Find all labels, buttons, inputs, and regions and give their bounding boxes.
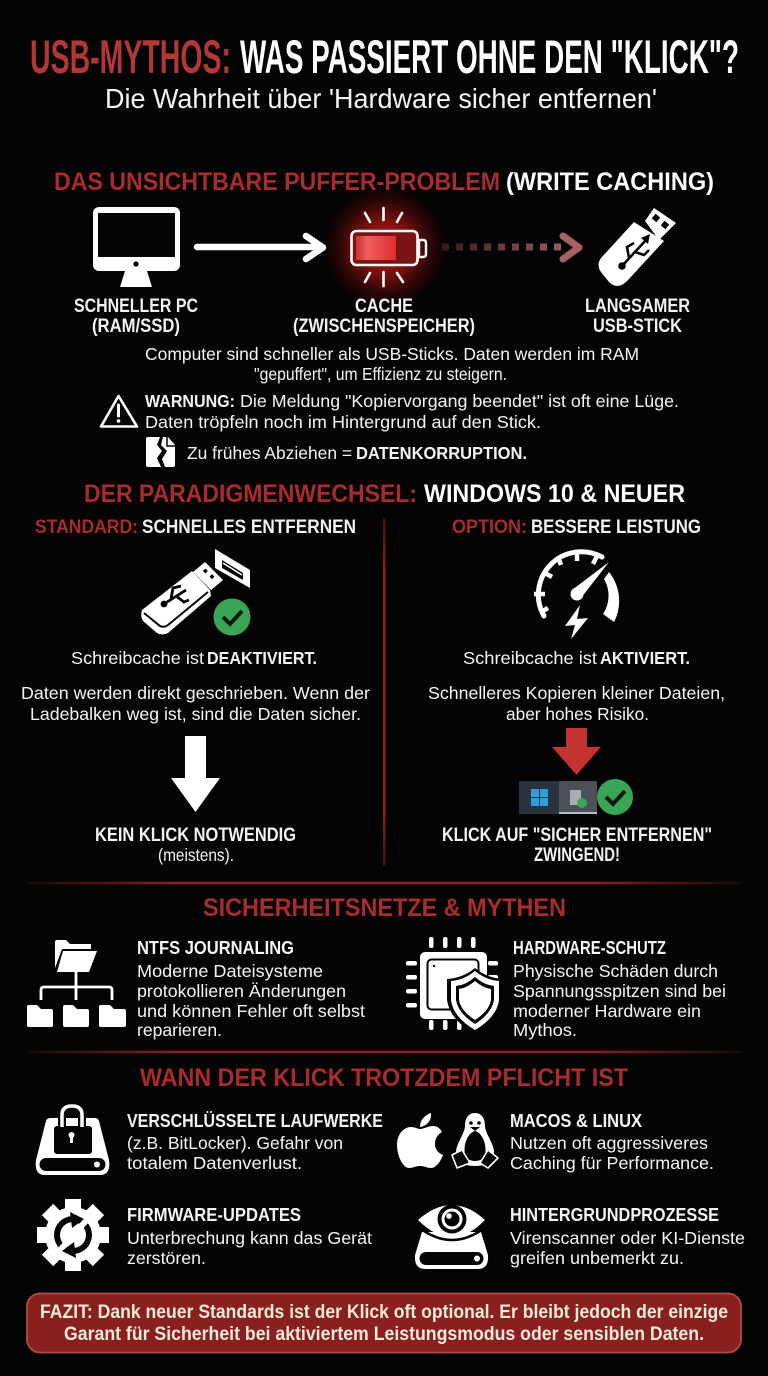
text: macOS and Linux	[510, 1111, 714, 1173]
text: background: Virenscanner oder KI-Dienste	[510, 1228, 745, 1248]
icon: warning triangle	[101, 396, 137, 426]
text: warning: Die Meldung "Kopiervorgang beendet" ist oft eine Lüge.	[240, 391, 679, 411]
panel: macOS and Linux	[397, 1111, 714, 1173]
text: NTFS: Moderne Dateisysteme	[137, 961, 323, 981]
text: macOS and Linux: MACOS & LINUX	[510, 1111, 642, 1131]
panel: write caching flow	[74, 185, 690, 337]
panel: NTFS journaling	[27, 938, 365, 1040]
arrow: white down	[171, 736, 220, 812]
icon: USB stick with socket	[141, 549, 250, 636]
text: NTFS: protokollieren Änderungen	[137, 981, 346, 1001]
text: click mandatory	[442, 825, 712, 866]
label: cache: (ZWISCHENSPEICHER)	[293, 316, 475, 337]
text: firmware: Unterbrechung kann das Gerät	[127, 1228, 372, 1248]
subheading: standard: SCHNELLES ENTFERNEN	[142, 517, 356, 538]
text: faster but risky: aber hohes Risiko.	[506, 704, 649, 724]
text: buffering explanation: "gepuffert", um Effizienz zu steigern.	[254, 364, 507, 384]
subheading: option	[452, 517, 701, 538]
text: click mandatory: KLICK AUF "SICHER ENTFERNEN"	[442, 825, 712, 846]
text: firmware	[127, 1205, 372, 1268]
text: encrypted: totalem Datenverlust.	[127, 1153, 302, 1173]
text: hardware	[513, 938, 726, 1040]
panel: option better performance	[428, 517, 725, 866]
text: data corruption: DATENKORRUPTION.	[356, 443, 527, 463]
label: fast PC: (RAM/SSD)	[92, 316, 180, 337]
text: no click needed: KEIN KLICK NOTWENDIG	[95, 825, 296, 846]
heading: when the click is mandatory: WANN DER KLICK TROTZDEM PFLICHT IST	[140, 1064, 628, 1092]
text: data corruption: Zu frühes Abziehen =	[187, 443, 352, 463]
icon: apple logo	[397, 1113, 443, 1168]
text: hardware: moderner Hardware ein	[513, 1001, 701, 1021]
icon: taskbar with safe-remove check	[519, 779, 633, 815]
text: data corruption	[187, 443, 527, 463]
icon: locked drive	[36, 1106, 109, 1175]
text: firmware: zerstören.	[127, 1248, 206, 1268]
text: encrypted	[127, 1111, 383, 1173]
text: write cache disabled	[71, 648, 317, 668]
label: cache: CACHE	[355, 296, 413, 317]
text: faster but risky: Schnelleres Kopieren kleiner Dateien,	[428, 683, 725, 703]
panel: encrypted drives	[36, 1106, 383, 1175]
icon: speedometer	[534, 550, 619, 639]
text: write cache disabled: Schreibcache ist	[71, 648, 204, 668]
subtitle: Die Wahrheit über 'Hardware sicher entfernen'	[105, 83, 657, 114]
text: macOS and Linux: Nutzen oft aggressiveres	[510, 1133, 708, 1153]
label: slow USB stick: LANGSAMER	[585, 296, 690, 317]
callout: conclusion: Garant für Sicherheit bei aktiviertem Leistungsmodus oder sensiblen Daten.	[64, 1324, 704, 1345]
text: firmware: FIRMWARE-UPDATES	[127, 1205, 301, 1225]
text: direct write: Ladebalken weg ist, sind die Daten sicher.	[30, 704, 361, 724]
text: direct write: Daten werden direkt geschrieben. Wenn der	[21, 683, 370, 703]
subheading: standard: STANDARD:	[35, 517, 138, 538]
icon: drive with eye	[415, 1204, 488, 1269]
heading: write caching: (WRITE CACHING)	[506, 168, 714, 196]
text: warning: WARNUNG:	[145, 391, 235, 411]
arrow: fast transfer	[197, 236, 323, 259]
arrow: slow dotted transfer	[442, 236, 579, 259]
text: buffering explanation: Computer sind schneller als USB-Sticks. Daten werden im RAM	[145, 344, 639, 364]
label: slow USB stick	[585, 296, 690, 337]
subheading: standard	[35, 517, 356, 538]
heading: paradigm shift: WINDOWS 10 & NEUER	[424, 480, 685, 508]
text: NTFS	[137, 938, 365, 1040]
heading: safety nets and myths: SICHERHEITSNETZE & MYTHEN	[203, 894, 566, 922]
text: hardware: Mythos.	[513, 1020, 577, 1040]
title: USB-MYTHOS:	[30, 30, 231, 83]
text: write cache enabled: AKTIVIERT.	[600, 648, 690, 668]
text: write cache disabled: DEAKTIVIERT.	[207, 648, 317, 668]
arrow: red down	[552, 728, 601, 775]
text: write cache enabled: Schreibcache ist	[463, 648, 597, 668]
text: direct write	[21, 683, 370, 724]
text: write cache enabled	[463, 648, 690, 668]
text: NTFS: NTFS JOURNALING	[137, 938, 294, 958]
text: no click needed	[95, 825, 296, 865]
text: background	[510, 1205, 745, 1268]
panel: firmware updates	[37, 1199, 372, 1271]
text: warning: Daten tröpfeln noch im Hintergrund auf den Stick.	[145, 412, 541, 432]
icon: chip with shield	[406, 937, 503, 1034]
icon: USB stick	[598, 208, 676, 286]
icon: linux penguin	[452, 1113, 498, 1168]
text: NTFS: reparieren.	[137, 1020, 222, 1040]
title	[30, 30, 739, 83]
subheading: option: BESSERE LEISTUNG	[531, 517, 701, 538]
text: encrypted: (z.B. BitLocker). Gefahr von	[127, 1133, 343, 1153]
text: background: greifen unbemerkt zu.	[510, 1248, 684, 1268]
text: warning	[145, 391, 679, 432]
text: NTFS: und können Fehler oft selbst	[137, 1001, 365, 1021]
panel: background processes	[415, 1204, 745, 1269]
text: hardware: HARDWARE-SCHUTZ	[513, 938, 666, 958]
icon: folder tree	[27, 940, 126, 1027]
icon: computer monitor	[93, 207, 180, 287]
label: slow USB stick: USB-STICK	[593, 316, 682, 337]
heading: write caching: DAS UNSICHTBARE PUFFER-PROBLEM	[54, 168, 500, 196]
text: no click needed: (meistens).	[158, 845, 234, 865]
subheading: option: OPTION:	[452, 517, 527, 538]
text: encrypted: VERSCHLÜSSELTE LAUFWERKE	[127, 1111, 383, 1131]
callout: conclusion: FAZIT: Dank neuer Standards ist der Klick oft optional. Er bleibt jedoch der einzige	[40, 1302, 728, 1323]
text: hardware: Physische Schäden durch	[513, 961, 718, 981]
text: background: HINTERGRUNDPROZESSE	[510, 1205, 719, 1225]
icon: broken file	[146, 437, 175, 467]
label: fast PC	[74, 296, 198, 337]
callout: conclusion	[27, 1294, 741, 1352]
panel: standard quick removal	[21, 517, 370, 865]
icon: gear with refresh arrows	[37, 1199, 109, 1271]
heading: paradigm shift	[84, 480, 685, 508]
label: cache	[293, 296, 475, 337]
text: hardware: Spannungsspitzen sind bei	[513, 981, 726, 1001]
icon: glowing cache battery	[323, 185, 447, 309]
panel: hardware protection	[406, 937, 726, 1040]
text: macOS and Linux: Caching für Performance.	[510, 1153, 714, 1173]
text: faster but risky	[428, 683, 725, 724]
heading: paradigm shift: DER PARADIGMENWECHSEL:	[84, 480, 417, 508]
text: buffering explanation	[145, 344, 639, 384]
text: click mandatory: ZWINGEND!	[534, 845, 620, 866]
label: fast PC: SCHNELLER PC	[74, 296, 198, 317]
